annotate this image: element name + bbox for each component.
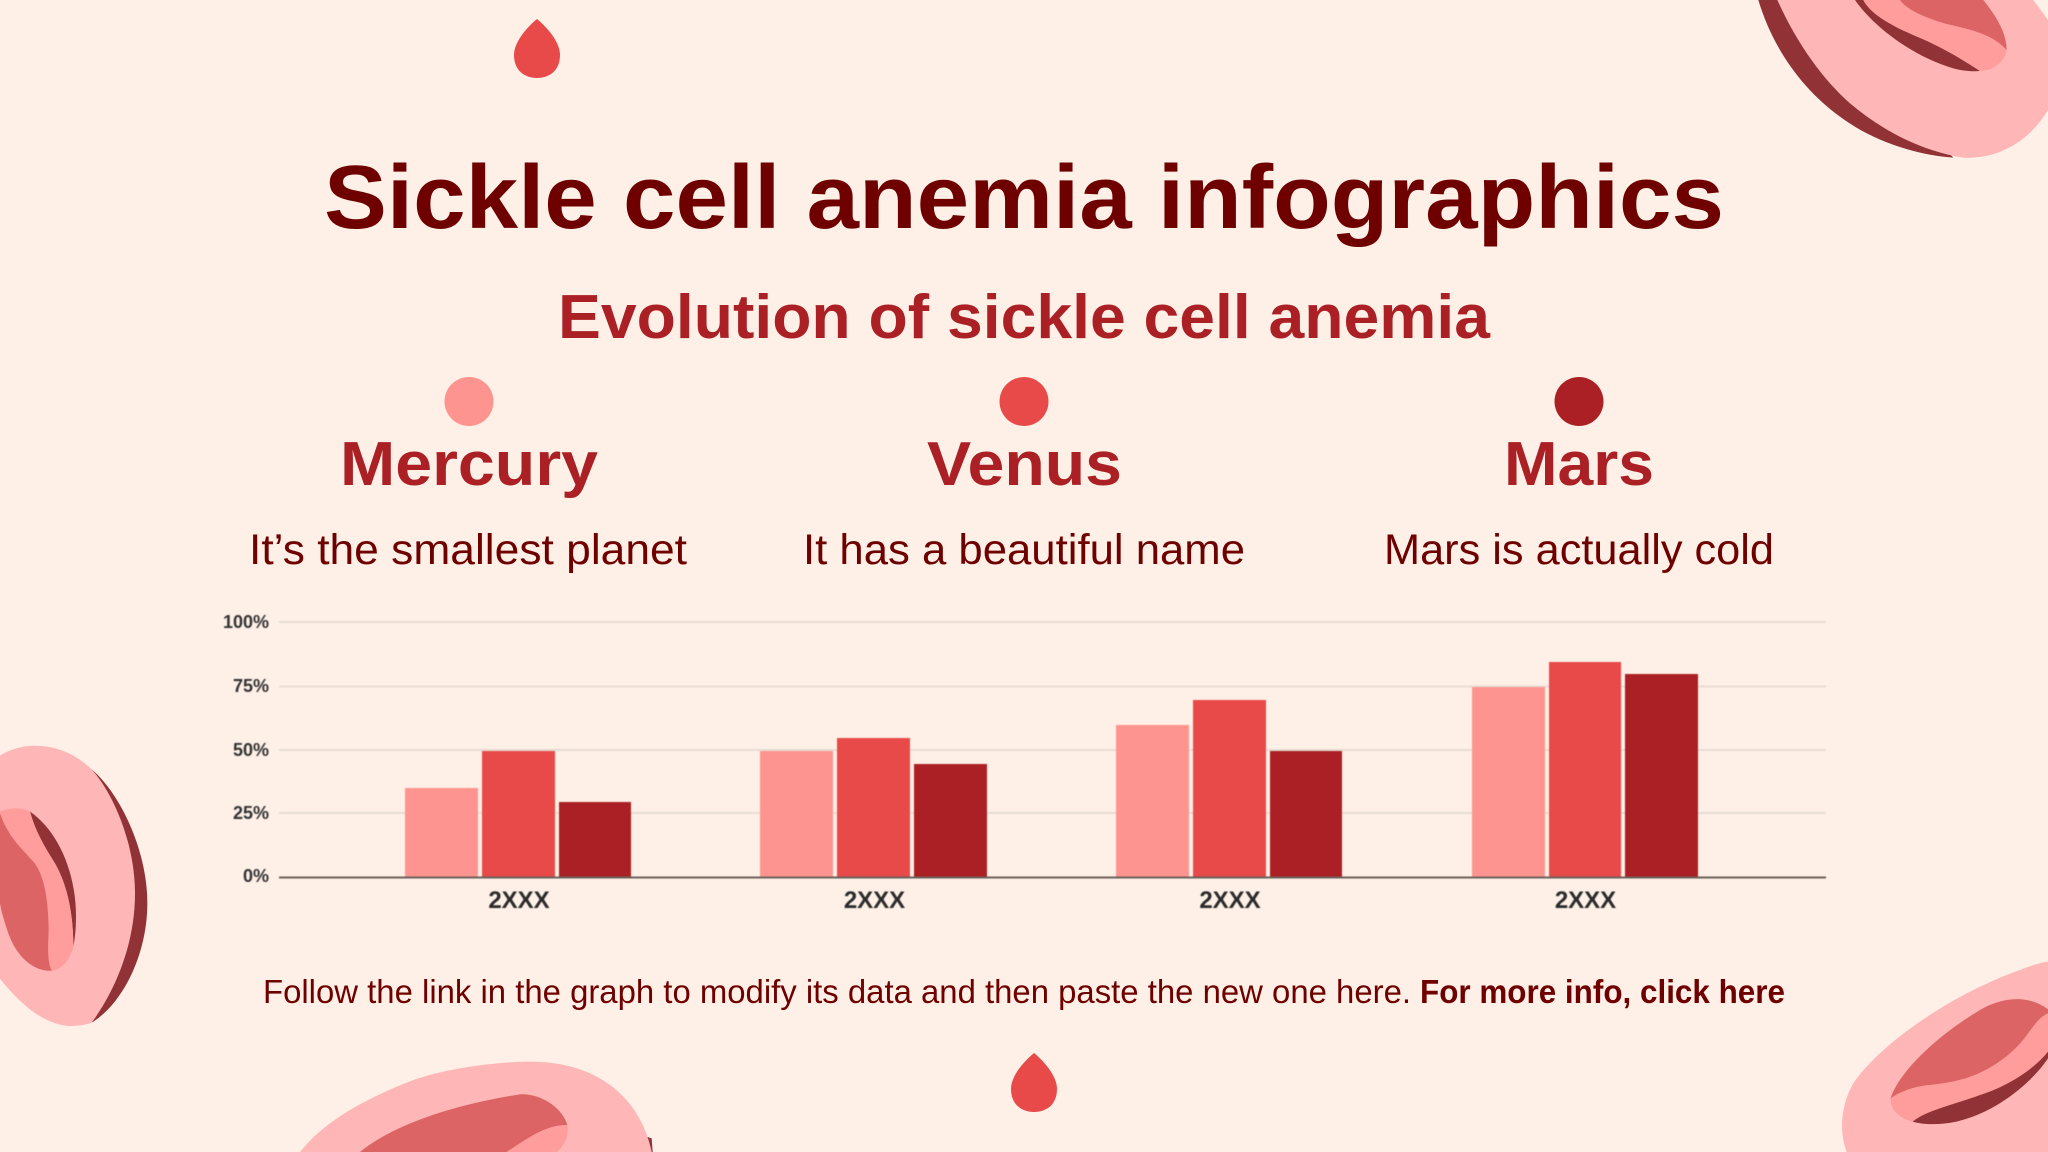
column: Venus xyxy=(803,377,1245,574)
icon: sickle cell top right xyxy=(1758,0,2048,158)
y axis labels: 75% xyxy=(233,676,269,696)
icon: blood drop top xyxy=(514,19,560,78)
x axis labels: 2XXX xyxy=(844,887,905,914)
bars: group 3 xyxy=(1116,700,1342,877)
marker: Mercury colour dot xyxy=(444,377,494,426)
heading: Mars: Mars xyxy=(1504,430,1654,499)
x axis labels: 2XXX xyxy=(1555,887,1616,914)
icon: sickle cell bottom right xyxy=(1842,962,2048,1152)
y axis labels: 25% xyxy=(233,803,269,823)
x axis labels: 2XXX xyxy=(1199,887,1261,914)
footer note: Follow the link in the graph to modify its data and then paste the new one here. xyxy=(263,973,1411,1010)
bars: group 1 xyxy=(405,751,631,877)
heading: Mercury: Mercury xyxy=(340,430,599,499)
title: Sickle cell anemia infographics xyxy=(324,148,1724,248)
column: Mercury xyxy=(249,377,687,574)
text: Mercury description: It’s the smallest planet xyxy=(249,526,687,574)
column: Mars xyxy=(1384,377,1774,574)
text: Venus description: It has a beautiful name xyxy=(803,526,1245,574)
icon: blood drop bottom xyxy=(1011,1053,1057,1112)
marker: Mars colour dot xyxy=(1554,377,1604,426)
footer note: For more info, click here xyxy=(1420,973,1785,1010)
bars: group 2 xyxy=(760,738,987,877)
x axis labels xyxy=(488,887,1616,914)
x axis labels: 2XXX xyxy=(488,887,550,914)
y axis labels xyxy=(223,612,269,886)
marker: Venus colour dot xyxy=(1000,377,1048,426)
text: Mars description: Mars is actually cold xyxy=(1384,526,1774,574)
bar chart xyxy=(223,612,1826,914)
icon: sickle cell bottom left xyxy=(300,1062,653,1152)
y axis labels: 0% xyxy=(243,866,269,886)
bars: group 4 xyxy=(1472,662,1698,877)
y axis labels: 50% xyxy=(233,740,269,760)
icon: sickle cell left xyxy=(0,746,147,1026)
subtitle: Evolution of sickle cell anemia xyxy=(558,283,1491,352)
heading: Venus: Venus xyxy=(927,430,1122,499)
y axis labels: 100% xyxy=(223,612,269,632)
